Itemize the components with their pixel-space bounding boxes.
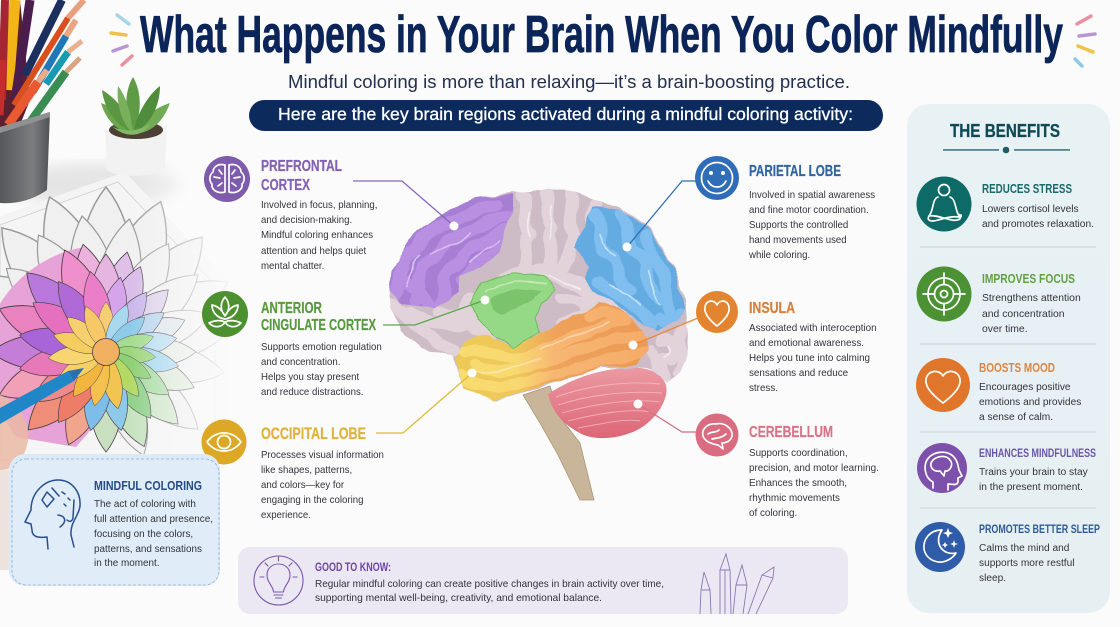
cerebellum [548,368,667,438]
text block: stress. [749,383,778,394]
benefit: enhances mindfulness [917,443,1096,493]
heading [261,158,342,194]
callout: prefrontal cortex [204,156,377,272]
icon: light bulb [254,556,303,605]
text block [982,293,1081,335]
text block [749,323,877,394]
text block: patterns, and sensations [94,544,202,555]
text block: over time. [982,324,1028,335]
text block: The act of coloring with [94,499,196,510]
text block [315,579,664,604]
text block: engaging in the coloring [261,495,363,506]
heading: GOOD TO KNOW: [315,562,391,574]
text block: supporting mental well-being, creativity, and emotional balance. [315,593,602,604]
text block [261,342,382,398]
text block: and concentration [982,309,1065,320]
benefit: promotes better sleep [915,522,1100,584]
text block: rhythmic movements [749,493,840,504]
icon: pencil cup [0,0,84,203]
text block: hand movements used [749,235,847,246]
text block: like shapes, patterns, [261,465,352,476]
text block [979,467,1089,493]
icon: succulent plant [101,77,170,176]
text block: and colors—key for [261,480,345,491]
heading: REDUCES STRESS [982,182,1072,196]
heading: PARIETAL LOBE [749,163,841,180]
text block: attention and helps quiet [261,246,366,257]
text block: Regular mindful coloring can create positive changes in brain activity over time, [315,579,664,590]
brain stem [523,386,594,500]
text block: Calms the mind and [979,543,1070,554]
divider [943,147,1070,153]
text block: Encourages positive [979,382,1071,393]
photo: coloring desk scene [0,0,238,570]
text block [979,543,1075,584]
text block [982,204,1094,230]
text block [749,448,879,519]
heading [261,300,376,334]
text block: supports more restful [979,558,1075,569]
icon: brain [204,156,250,202]
text block: Helps you tune into calming [749,353,870,364]
text block: sleep. [979,573,1006,584]
icon: coloring page [0,172,238,470]
text block: Strengthens attention [982,293,1081,304]
text block: while coloring. [748,250,810,261]
text block: Mindful coloring enhances [261,230,373,241]
icon: left title sparks [111,15,132,65]
text block: experience. [261,510,311,521]
icon: head [25,480,80,549]
heading: OCCIPITAL LOBE [261,424,366,443]
heading: BOOSTS MOOD [979,361,1055,375]
text block: mental chatter. [261,261,324,272]
text block: Supports coordination, [749,448,848,459]
text block: Trains your brain to stay [979,467,1089,478]
desk shadow [10,163,180,207]
text block: Processes visual information [261,450,384,461]
icon: brain [696,414,738,456]
brain diagram [385,185,695,500]
panel: the benefits [907,104,1110,613]
fade of mandala into page [130,170,235,480]
text block: precision, and motor learning. [749,463,879,474]
text block: of coloring. [749,508,797,519]
text block: and promotes relaxation. [982,219,1094,230]
parietal region [574,206,686,331]
icon: heart [696,291,738,333]
heading: IMPROVES FOCUS [982,272,1075,286]
text block: Involved in focus, planning, [261,200,377,211]
subtitle: Mindful coloring is more than relaxing—it’s a brain-boosting practice. [288,71,850,92]
text block: in the present moment. [979,482,1083,493]
text block: full attention and presence, [94,514,213,525]
text block [94,499,213,569]
heading: CINGULATE CORTEX [261,317,376,334]
text block: Enhances the smooth, [749,478,847,489]
text block [979,382,1081,423]
icon: eye [202,420,246,464]
text block: a sense of calm. [979,412,1053,423]
icon: right title sparks [1075,16,1095,66]
text block: and concentration. [261,357,340,368]
panel: mindful coloring [9,454,220,586]
icon: meditation [916,176,972,232]
limbic region [470,273,555,347]
divider [920,247,1096,508]
cerebrum base [385,185,695,405]
icon: pencils [700,554,774,614]
icon: lotus [202,291,248,337]
icon: hand and blue pencil [0,368,84,570]
heading: CEREBELLUM [749,424,833,441]
text block: emotions and provides [979,397,1081,408]
callout: insula [696,291,877,394]
icon: heart [916,358,970,412]
benefit: boosts mood [916,358,1081,423]
text block: sensations and reduce [749,368,848,379]
text block: Associated with interoception [749,323,877,334]
text block: focusing on the colors, [94,529,193,540]
heading: CORTEX [261,177,310,194]
text block: and emotional awareness. [749,338,864,349]
icon: colored mandala [0,241,200,453]
benefit: reduces stress [916,176,1094,232]
heading: THE BENEFITS [950,121,1060,141]
icon: head with brain [917,443,967,493]
icon: moon and stars [915,522,965,572]
heading: PREFRONTAL [261,158,342,175]
text block [261,200,377,272]
text block: in the moment. [94,558,160,569]
banner [249,100,883,131]
text block [748,190,875,261]
callout: anterior cingulate cortex [202,291,382,398]
heading: ANTERIOR [261,300,322,317]
mandala colour wash [0,247,106,447]
text block: and fine motor coordination. [749,205,869,216]
heading: INSULA [749,300,795,317]
temporal band [455,303,647,400]
benefit: improves focus [916,266,1081,335]
text block: Involved in spatial awareness [749,190,875,201]
text block: Lowers cortisol levels [982,204,1079,215]
banner: Here are the key brain regions activated during a mindful coloring activity: [278,104,853,124]
text block: Helps you stay present [261,372,359,383]
leader lines [353,181,698,433]
text block [261,450,384,521]
callout: cerebellum [696,414,879,519]
heading: MINDFUL COLORING [94,479,202,493]
icon: target [916,266,972,322]
text block: Supports the controlled [749,220,848,231]
icon: smiley [695,156,739,200]
text block: Supports emotion regulation [261,342,382,353]
prefrontal region [389,193,514,308]
panel: good to know [238,547,848,614]
cerebrum regions [385,185,695,405]
callout: parietal lobe [695,156,875,261]
text block: and decision-making. [261,215,352,226]
callout: occipital lobe [202,420,384,521]
text block: and reduce distractions. [261,387,363,398]
